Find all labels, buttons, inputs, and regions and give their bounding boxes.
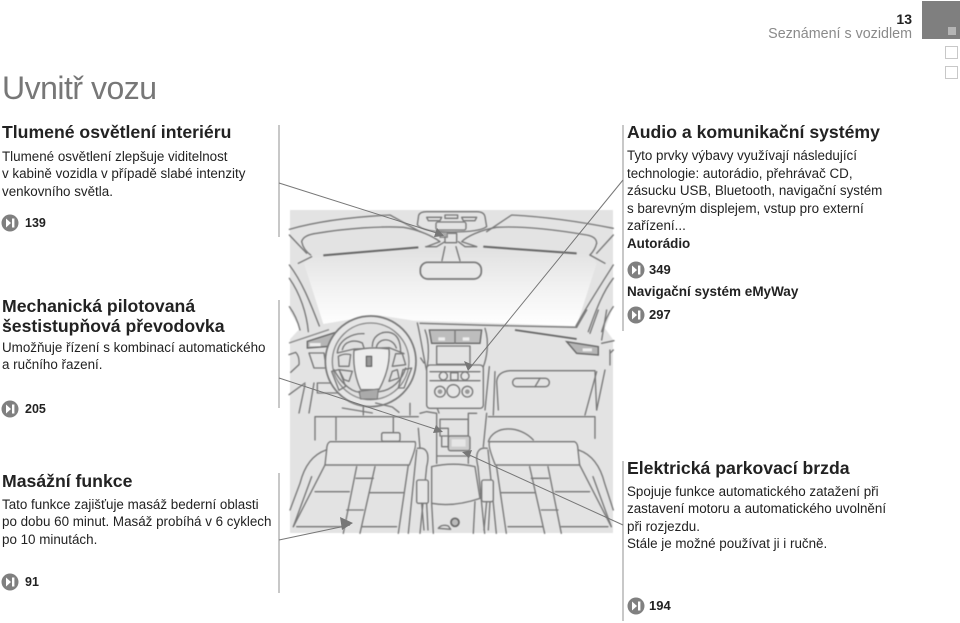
body text: venkovního světla. xyxy=(2,184,113,199)
body text: Tyto prvky výbavy využívají následující xyxy=(627,148,857,163)
title: Uvnitř vozu xyxy=(2,70,157,106)
body text xyxy=(627,484,886,551)
chapter tab: active xyxy=(922,1,960,39)
body text: a ručního řazení. xyxy=(2,357,102,372)
steering wheel and left dashboard xyxy=(289,316,439,413)
heading: Elektrická parkovací brzda xyxy=(627,458,850,478)
body text: zásucku USB, Bluetooth, navigační systém xyxy=(627,183,882,198)
heading: Mechanická pilotovaná xyxy=(2,296,195,316)
panel: interior mood lighting xyxy=(2,122,246,232)
chapter tab: third xyxy=(945,66,958,79)
body text xyxy=(2,497,271,547)
page reference 297: 297 xyxy=(649,307,671,322)
body text: Umožňuje řízení s kombinací automatického xyxy=(2,340,265,355)
page reference 205 xyxy=(2,400,46,418)
body text xyxy=(2,340,265,372)
body text: po 10 minutách. xyxy=(2,532,97,547)
body text: Autorádio xyxy=(627,236,690,251)
body text: po dobu 60 minut. Masáž probíhá v 6 cyklech xyxy=(2,514,271,529)
body text xyxy=(2,149,246,199)
illustration artwork xyxy=(289,210,614,533)
left seat xyxy=(290,442,428,533)
body text: Tlumené osvětlení zlepšuje viditelnost xyxy=(2,149,228,164)
page reference 349 xyxy=(628,262,671,278)
heading: Tlumené osvětlení interiéru xyxy=(2,122,231,142)
centre console and right dashboard xyxy=(420,310,614,410)
page reference 91: 91 xyxy=(25,575,39,589)
page reference 349: 349 xyxy=(649,262,671,277)
page reference 194 xyxy=(628,598,671,614)
body text: Stále je možné používat ji i ručně. xyxy=(627,536,827,551)
panel: manual gearbox xyxy=(2,296,265,418)
panel: audio and communication systems xyxy=(627,122,882,324)
body text: při rozjezdu. xyxy=(627,519,700,534)
page reference 194: 194 xyxy=(649,598,671,613)
body text: Tato funkce zajišťuje masáž bederní oblasti xyxy=(2,497,259,512)
heading: Audio a komunikační systémy xyxy=(627,122,880,142)
windscreen and roof xyxy=(289,212,613,340)
body text: zařízení... xyxy=(627,218,686,233)
page reference 139 xyxy=(2,214,46,232)
body text: Spojuje funkce automatického zatažení při xyxy=(627,484,879,499)
chapter tab: second xyxy=(945,46,958,59)
body text: s barevným displejem, vstup pro externí xyxy=(627,201,864,216)
heading: Masážní funkce xyxy=(2,471,132,491)
heading xyxy=(2,296,225,336)
body text xyxy=(627,148,882,251)
page reference 205: 205 xyxy=(25,402,46,416)
page reference 139: 139 xyxy=(25,216,46,230)
panel: massage function xyxy=(2,471,271,590)
heading: šestistupňová převodovka xyxy=(2,316,225,336)
panel: electric parking brake xyxy=(627,458,886,614)
callout lines xyxy=(279,125,623,621)
body text: technologie: autorádio, přehrávač CD, xyxy=(627,166,853,181)
illustration background xyxy=(290,210,613,533)
page number: 13 xyxy=(896,11,912,27)
body text: v kabině vozidla v případě slabé intenzity xyxy=(2,166,245,181)
body text: zastavení motoru a automatického uvolnění xyxy=(627,501,886,516)
rear-view mirror xyxy=(420,262,481,279)
page reference 91 xyxy=(2,574,39,590)
gear selector and tunnel xyxy=(417,412,493,533)
page reference 297 xyxy=(628,306,671,324)
right seat xyxy=(477,442,613,533)
navigation subheading: Navigační systém eMyWay xyxy=(627,284,798,299)
seats and centre tunnel xyxy=(290,372,613,533)
chapter name: Seznámení s vozidlem xyxy=(768,26,912,42)
